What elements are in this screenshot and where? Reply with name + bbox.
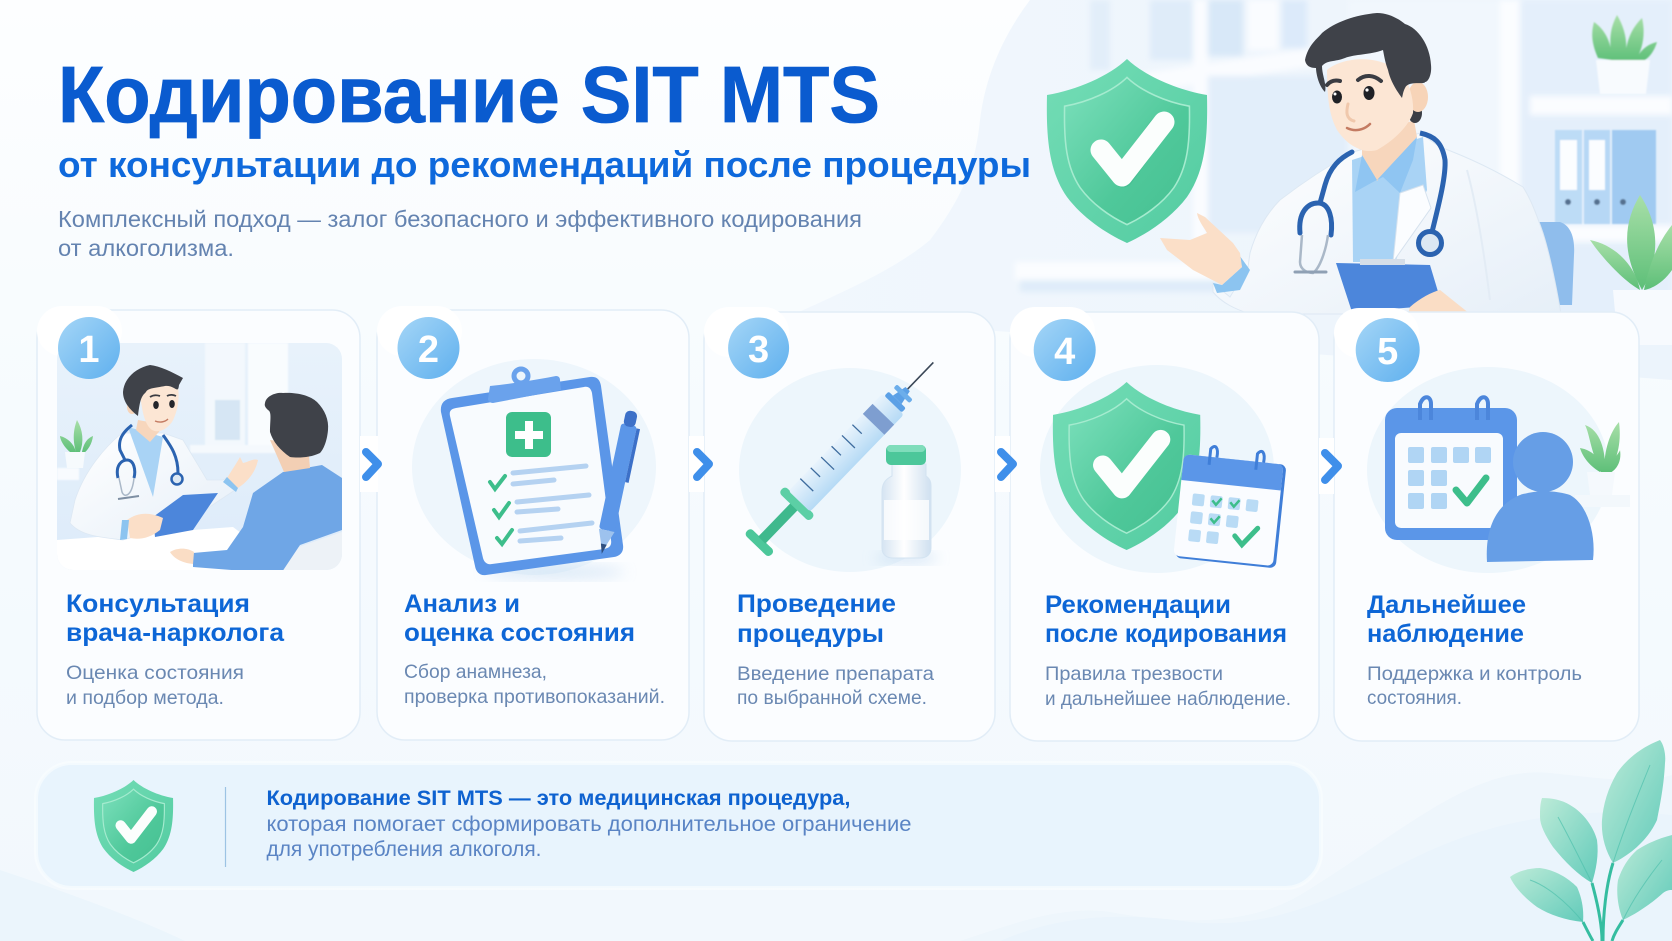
card 1 heading: [66, 590, 285, 647]
card 4 heading: [1045, 591, 1287, 648]
small doctor cuffs: [120, 477, 238, 540]
calendar: [1385, 397, 1517, 540]
card 4 description: Правила трезвости: [1045, 663, 1223, 685]
doctor: clipboard: [1336, 263, 1442, 312]
small doctor coat: [70, 433, 235, 540]
card 2 illustration: clipboard and pen: [412, 359, 656, 578]
card 5 number badge: 5: [1377, 331, 1398, 373]
card 5 heading: наблюдение: [1367, 620, 1524, 648]
step card 2: [377, 306, 689, 740]
icon: decorative leaves: [1510, 740, 1672, 941]
card 2 description: Сбор анамнеза,: [404, 661, 547, 683]
doctor: hair: [1305, 13, 1431, 98]
doctor: raised hand: [1160, 213, 1242, 285]
card 1 description: Оценка состояния: [66, 662, 244, 684]
small doctor ear: [127, 405, 134, 414]
icon: top plant on shelf: [1592, 15, 1657, 94]
plant: [1575, 422, 1630, 507]
leaf stems: [1583, 863, 1623, 941]
small clipboard: [153, 493, 218, 537]
card 3 panel: [704, 307, 995, 741]
card 5 illustration: calendar, person, plant: [1367, 367, 1630, 573]
intro paragraph: [58, 206, 862, 261]
icon: small shield: [94, 780, 173, 872]
card 2 description: [404, 661, 665, 708]
card 3 description: [737, 663, 934, 709]
card 2 heading: [404, 590, 635, 647]
card 3 description: по выбранной схеме.: [737, 687, 927, 709]
syringe: [741, 348, 948, 560]
background: blurred clinic room: [790, 0, 1672, 380]
doctor: cuff: [1213, 252, 1250, 293]
pen: [594, 409, 643, 556]
patient hand: [170, 549, 194, 564]
arrow: step 2 to 3: [689, 436, 709, 492]
arrow: step 4 to 5: [1319, 438, 1338, 494]
step card 5: [1334, 308, 1639, 741]
doctor: neck: [1362, 120, 1417, 181]
panel text: Кодирование SIT MTS — это медицинская процедура,: [266, 787, 850, 810]
step card 4: [1010, 307, 1319, 741]
arrow: step 1 to 2: [360, 436, 378, 492]
card 4 number badge: 4: [1054, 331, 1075, 373]
small doctor hands: [127, 457, 258, 539]
table: [57, 527, 240, 570]
card 3 heading: Проведение: [737, 590, 896, 618]
leaf right: [1617, 835, 1672, 920]
small plant: [60, 420, 93, 468]
doctor: stethoscope: [1295, 133, 1445, 273]
card 5 number badge: [1356, 318, 1420, 382]
panel text: которая помогает сформировать дополнительное ограничение: [266, 813, 912, 836]
subtitle: от консультации до рекомендаций после процедуры: [58, 144, 1031, 185]
doctor: lower hand: [1408, 290, 1470, 314]
doctor illustration: [1160, 13, 1561, 314]
card 4 heading: после кодирования: [1045, 620, 1287, 648]
card 2 description: проверка противопоказаний.: [404, 686, 665, 708]
card 5 heading: Дальнейшее: [1367, 591, 1526, 619]
card 3 heading: процедуры: [737, 620, 884, 648]
small doctor shirt: [128, 427, 163, 497]
person: [1487, 432, 1594, 562]
card 1 number badge: [58, 317, 120, 379]
doctor: coat fold: [1467, 170, 1490, 300]
card 5 heading: [1367, 591, 1526, 648]
card 1 heading: врача-нарколога: [66, 619, 285, 647]
patient neck: [270, 440, 310, 472]
step card 1: [37, 306, 360, 740]
card 2 heading: Анализ и: [404, 590, 520, 618]
vial: [874, 445, 938, 563]
card 3 number badge: [728, 318, 789, 378]
card 3 number badge: 3: [748, 329, 769, 371]
leaf top: [1602, 740, 1665, 863]
card 5 description: [1367, 663, 1582, 709]
small doctor face: [140, 382, 179, 431]
intro paragraph: от алкоголизма.: [58, 235, 234, 261]
intro paragraph: Комплексный подход — залог безопасного и эффективного кодирования: [58, 206, 862, 232]
patient hair: [265, 393, 328, 458]
clipboard board: [441, 377, 623, 575]
checklist: [490, 466, 592, 544]
doctor: shirt: [1352, 137, 1427, 262]
leaf veins: [1530, 765, 1662, 922]
card 1 illustration: doctor and patient: [57, 343, 342, 572]
icon: chair: [1537, 222, 1574, 305]
doctor: coat: [1213, 133, 1561, 314]
title: Кодирование SIT MTS: [58, 50, 880, 139]
icon: lower plant and pot: [1590, 195, 1672, 345]
doctor: collar: [1355, 137, 1417, 193]
doctor: ear: [1408, 82, 1428, 112]
panel background: [36, 763, 1321, 888]
card 1 heading: Консультация: [66, 590, 250, 618]
doctor: nose and mouth: [1347, 104, 1354, 121]
card 1 description: [66, 662, 244, 709]
card 4 description: и дальнейшее наблюдение.: [1045, 688, 1291, 710]
card 2 number badge: [398, 317, 460, 379]
card 3 description: Введение препарата: [737, 663, 934, 685]
leaf lower left: [1510, 868, 1583, 922]
icon: binders on shelf: [1555, 130, 1656, 224]
card 4 number badge: [1034, 319, 1096, 381]
icon: large shield with check: [1047, 59, 1207, 243]
leaf left: [1540, 798, 1598, 883]
card 5 description: Поддержка и контроль: [1367, 663, 1582, 685]
green cross: [506, 412, 551, 457]
card 3 heading: [737, 590, 896, 648]
card 4 illustration: shield and calendar: [1040, 365, 1288, 573]
calendar: [1173, 443, 1288, 568]
panel text: для употребления алкоголя.: [266, 838, 542, 861]
card 2 number badge: 2: [418, 329, 439, 371]
shield: [1053, 382, 1200, 550]
doctor: hair behind ear: [1408, 103, 1422, 123]
clipboard clip: [488, 376, 561, 403]
arrow: step 3 to 4: [995, 436, 1013, 492]
card 2 heading: оценка состояния: [404, 619, 635, 647]
small doctor neck: [136, 420, 160, 442]
doctor: brows: [1327, 76, 1381, 85]
card 1 number badge: 1: [78, 329, 100, 371]
card 5 description: состояния.: [1367, 687, 1462, 709]
card 2 panel: [377, 306, 689, 740]
doctor: eyes: [1332, 86, 1374, 104]
panel text: [266, 787, 912, 861]
card 1 description: и подбор метода.: [66, 687, 224, 709]
small doctor hair: [123, 365, 183, 416]
card 4 heading: Рекомендации: [1045, 591, 1231, 619]
step card 3: [704, 307, 995, 741]
bottom info panel: [36, 763, 1321, 888]
card 4 panel: [1010, 307, 1319, 741]
patient body: [193, 465, 342, 572]
card 1 panel: [37, 306, 360, 740]
card 4 description: [1045, 663, 1291, 710]
doctor: lapel: [1393, 185, 1431, 262]
card 5 panel: [1334, 308, 1639, 741]
card 3 illustration: syringe and vial: [739, 348, 961, 572]
small chair: [282, 532, 342, 572]
doctor: face: [1327, 59, 1413, 151]
small stethoscope: [117, 425, 182, 499]
